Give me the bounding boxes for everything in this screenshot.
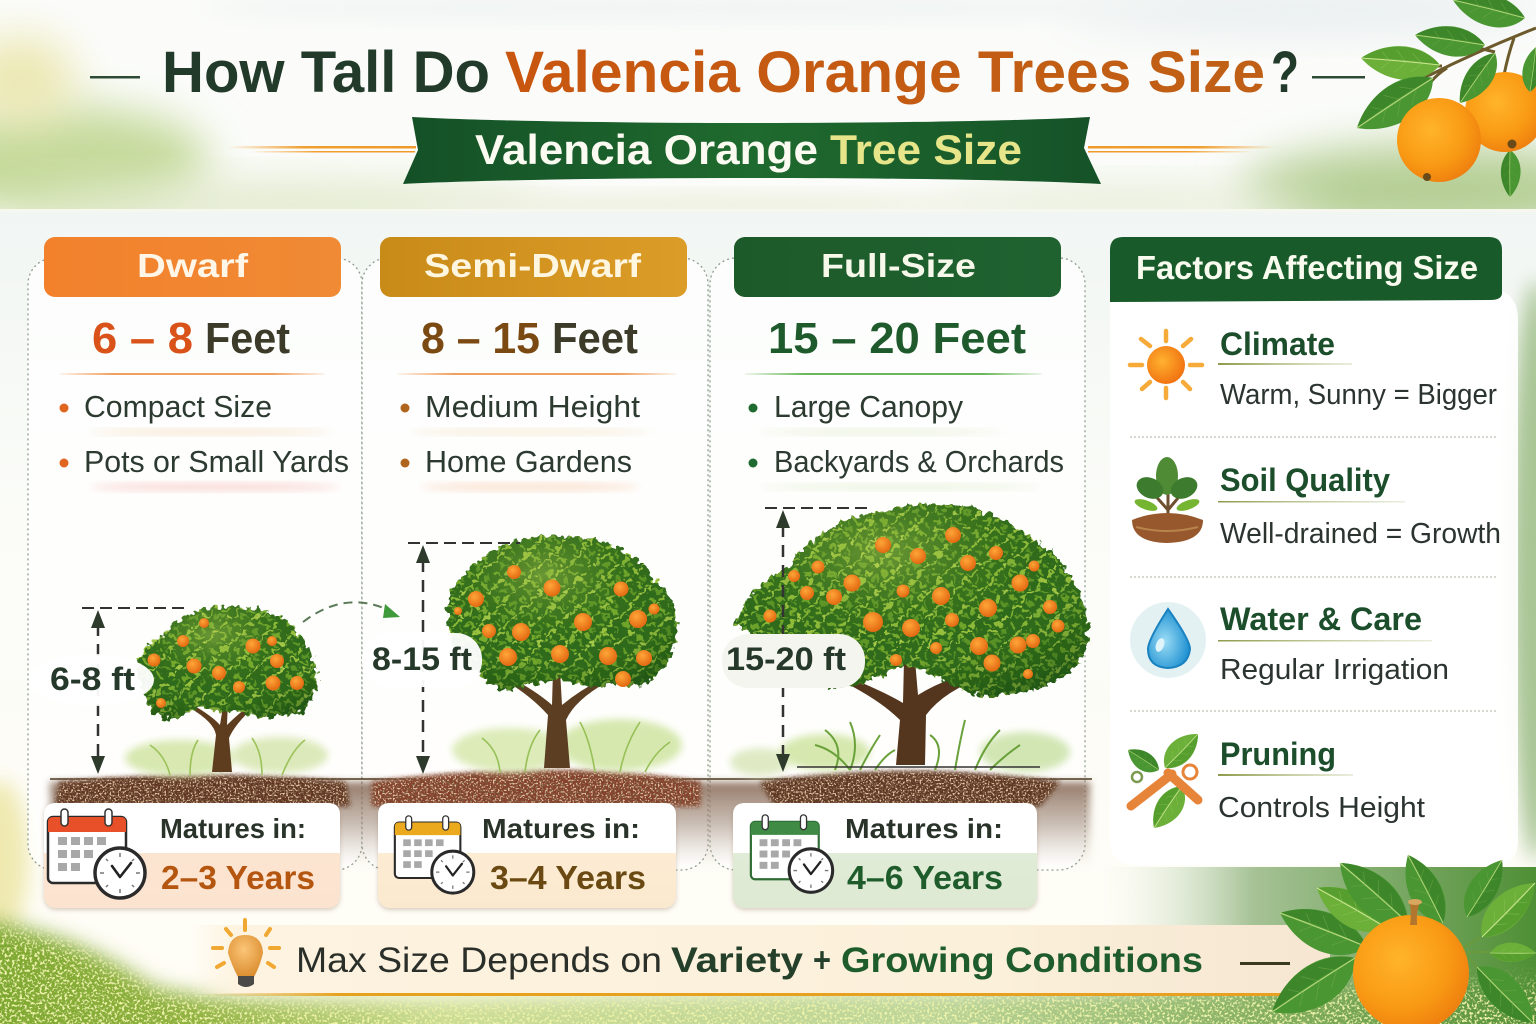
callout text: Variety (671, 941, 804, 980)
icon: lightbulb (213, 920, 279, 987)
factor: climate (1218, 326, 1497, 411)
value: years: 3–4 Years (490, 859, 646, 896)
height range: dwarf (60, 314, 325, 375)
bullets: full-size: Backyards & Orchards (774, 444, 1064, 479)
title: Valencia Orange Trees Size (505, 40, 1265, 105)
height range: dwarf: Feet (205, 314, 290, 363)
subtitle ribbon: Tree Size (830, 126, 1022, 173)
tree: dwarf (125, 606, 328, 776)
panel: semi-dwarf (362, 237, 708, 870)
title: How Tall Do (162, 40, 490, 105)
callout text: Growing Conditions (841, 941, 1203, 980)
trunk: semi-dwarf (504, 670, 607, 768)
height marker: dwarf (30, 608, 190, 774)
heading: full-size: Full-Size (821, 247, 976, 284)
height range: full-size: 15 – 20 Feet (768, 314, 1026, 363)
bullets: full-size: Large Canopy (774, 389, 963, 424)
icon: calendar and clock (48, 809, 145, 898)
callout text: + (813, 941, 831, 980)
card body: semi-dwarf (378, 803, 676, 908)
canopy: semi-dwarf (448, 536, 678, 690)
background: header bokeh (0, 0, 1536, 209)
factor: pruning: Controls Height (1218, 792, 1425, 824)
maturity card: full-size (733, 803, 1037, 908)
trunk: full-size (840, 660, 985, 765)
background: side haze (0, 209, 1536, 940)
icon: calendar and clock (395, 816, 474, 893)
factor: water and care (1218, 601, 1449, 686)
bullets: dwarf: Pots or Small Yards (84, 444, 349, 479)
panel: dwarf (28, 237, 362, 870)
height marker: full-size (722, 508, 1040, 772)
fruit: dwarf (148, 618, 304, 708)
factor: soil quality: Well-drained = Growth (1220, 518, 1501, 550)
icon: seedling in soil (1132, 457, 1203, 543)
label: matures in: Matures in: (482, 813, 640, 844)
factor: water and care: Regular Irrigation (1220, 654, 1449, 686)
canopy: full-size (735, 503, 1088, 696)
panel body: factors (1110, 290, 1518, 865)
label: matures in: Matures in: (160, 813, 306, 844)
height marker: full-size: 15-20 ft (726, 641, 846, 677)
card body: dwarf (44, 803, 340, 908)
factor: soil quality (1218, 462, 1501, 550)
panel: factors affecting size (1110, 237, 1518, 865)
heading: semi-dwarf (380, 237, 687, 297)
bullets: full-size (748, 389, 1064, 490)
callout bar (190, 920, 1330, 996)
height range: dwarf: 6 – 8 (92, 314, 193, 363)
callout text (296, 941, 1203, 980)
height marker: semi-dwarf: 8-15 ft (372, 641, 472, 677)
background: grass (0, 867, 1536, 1024)
canopy: dwarf (138, 606, 318, 719)
panel outline: semi-dwarf (362, 258, 708, 870)
title (90, 40, 1365, 105)
tree: full-size (730, 503, 1088, 776)
height marker: semi-dwarf (362, 543, 520, 774)
divider (1130, 576, 1496, 578)
heading: semi-dwarf: Semi-Dwarf (424, 247, 642, 284)
height range: semi-dwarf (398, 314, 676, 375)
bullets: dwarf: Compact Size (84, 389, 272, 424)
maturity card: dwarf (44, 803, 340, 908)
bullets: dwarf (60, 389, 349, 491)
icon: pruning shears (1123, 725, 1206, 835)
tree: semi-dwarf (448, 536, 682, 772)
value: years: 4–6 Years (847, 859, 1003, 896)
grass: full-size (730, 720, 1070, 776)
icon: sun (1130, 331, 1202, 398)
height range: semi-dwarf: 8 – 15 (421, 314, 540, 363)
divider (1130, 436, 1496, 438)
panel outline: dwarf (28, 258, 362, 870)
ground soil (50, 770, 1092, 867)
bullets: semi-dwarf (400, 389, 650, 491)
panel outline: full-size (710, 258, 1085, 870)
subtitle ribbon: Valencia Orange (475, 126, 818, 173)
fruit: semi-dwarf (454, 565, 660, 687)
title: ? (1271, 40, 1299, 105)
heading: dwarf (44, 237, 341, 297)
factor: pruning: Pruning (1220, 736, 1336, 772)
label: matures in: Matures in: (845, 813, 1003, 844)
grass: semi-dwarf (452, 719, 682, 772)
factor: climate: Climate (1220, 326, 1335, 362)
factor: climate: Warm, Sunny = Bigger (1220, 379, 1497, 411)
arrow: dwarf to semi-dwarf (303, 602, 400, 622)
icon: water drop (1130, 602, 1206, 678)
divider (1130, 710, 1496, 712)
bullets: semi-dwarf: Medium Height (425, 389, 640, 424)
bullets: semi-dwarf: Home Gardens (425, 444, 632, 479)
value: years: 2–3 Years (161, 859, 315, 896)
bottom orange with leaves (1261, 848, 1536, 1024)
factor: pruning (1218, 736, 1425, 824)
callout text: Max Size Depends on (296, 941, 662, 980)
height range: semi-dwarf: Feet (552, 314, 638, 363)
panel: full-size (710, 237, 1085, 870)
heading: factors (1110, 237, 1502, 302)
trunk: dwarf (190, 700, 254, 772)
maturity card: semi-dwarf (378, 803, 676, 908)
heading: dwarf: Dwarf (137, 247, 249, 284)
grass: dwarf (125, 737, 328, 776)
factor: soil quality: Soil Quality (1220, 462, 1390, 498)
icon: calendar and clock (751, 815, 833, 892)
heading: factors: Factors Affecting Size (1136, 249, 1478, 286)
top orange branch (1347, 0, 1536, 197)
heading: full-size (734, 237, 1061, 297)
fruit: full-size (764, 527, 1064, 679)
height marker: dwarf: 6-8 ft (50, 661, 135, 697)
factor: water and care: Water & Care (1220, 601, 1422, 637)
subtitle ribbon (228, 117, 1276, 184)
card body: full-size (733, 803, 1037, 908)
